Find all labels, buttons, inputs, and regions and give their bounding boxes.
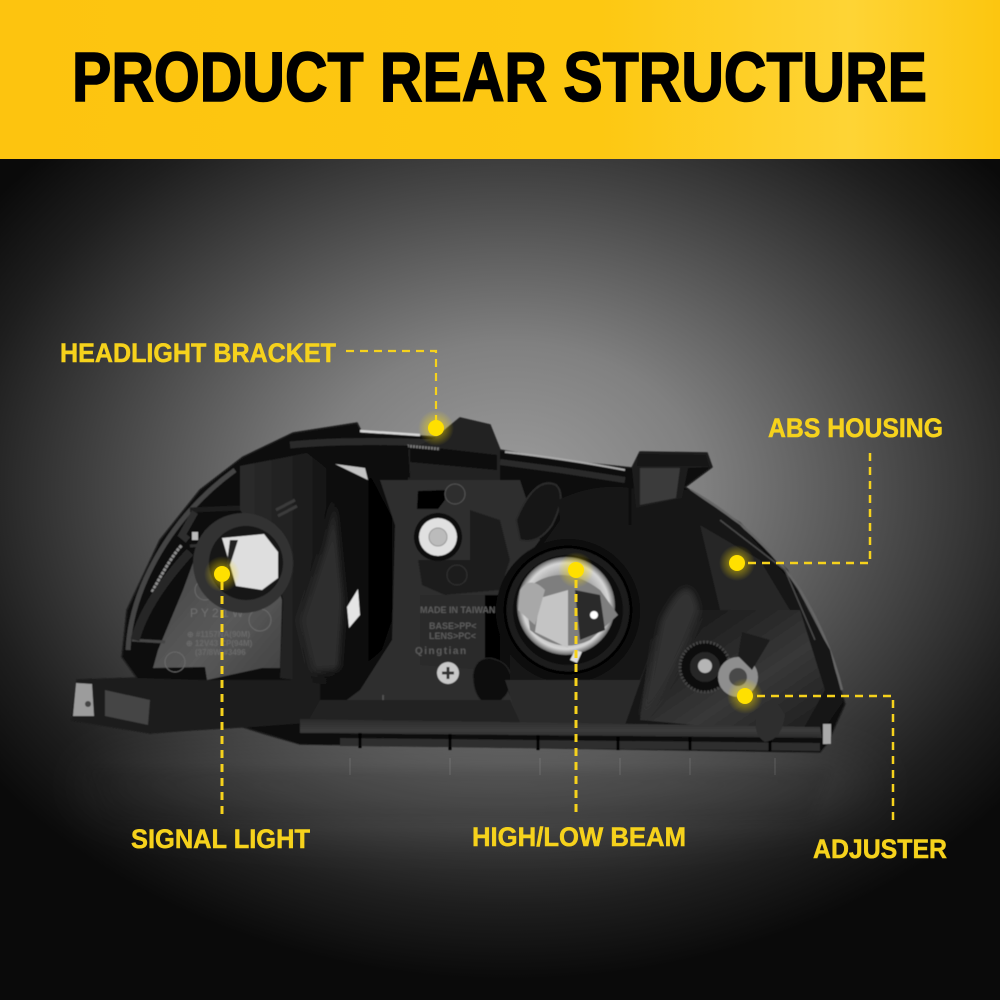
moulded bulb codes: (37/8W)#3496 [195, 648, 246, 657]
phillips screw [437, 662, 459, 684]
leader line: headlight bracket [346, 351, 436, 428]
floor reflection [80, 745, 880, 825]
mould marking text: MADE IN TAIWAN [420, 605, 495, 615]
headlight rear illustration [72, 418, 845, 752]
label: signal light: SIGNAL LIGHT [131, 824, 310, 854]
housing silhouette [72, 418, 845, 752]
callout: signal light [131, 556, 310, 854]
moulded bulb codes [186, 630, 253, 657]
lobe ribs [276, 500, 297, 516]
centre bolt [414, 513, 462, 561]
label: high/low beam: HIGH/LOW BEAM [472, 822, 686, 852]
label: headlight bracket: HEADLIGHT BRACKET [60, 338, 336, 368]
mould marking text [415, 605, 495, 657]
lobe label sticker [347, 589, 360, 628]
marker: signal light [204, 556, 240, 592]
leader line: high/low beam [574, 580, 578, 812]
marker: headlight bracket [418, 410, 454, 446]
grey plate below signal socket [153, 530, 282, 680]
label: abs housing: ABS HOUSING [768, 413, 943, 443]
lens rim highlights [128, 431, 842, 690]
moulded plate text: P Y 2 1 W [190, 606, 244, 620]
callout: high/low beam [472, 552, 686, 852]
left lens bulb wiring [132, 508, 240, 642]
marker: high/low beam [558, 552, 594, 588]
lobe soft highlight [300, 500, 345, 672]
mould marking text: Qingtian [415, 646, 468, 657]
corner pin [823, 724, 831, 744]
signal light socket [193, 513, 293, 613]
callout: headlight bracket [60, 338, 454, 446]
adjuster knob [756, 701, 785, 742]
callout: adjuster [727, 678, 947, 864]
header banner [0, 0, 1000, 159]
large dark lobe [240, 453, 392, 687]
leader line: abs housing [748, 452, 870, 563]
plug cap [473, 658, 511, 706]
callout: abs housing [719, 413, 943, 581]
label: adjuster: ADJUSTER [813, 834, 947, 864]
marker: adjuster [727, 678, 763, 714]
adjuster gear [680, 632, 770, 697]
moulded bulb codes: ⊕ 12V43 CP(94M) [186, 639, 253, 648]
mould marking text: BASE>PP< [429, 621, 477, 631]
right dark body [510, 452, 843, 735]
rubber elbow [516, 483, 561, 541]
central grey panel [300, 480, 540, 735]
leader line: adjuster [757, 696, 893, 825]
hand marking L: L [381, 693, 390, 710]
moulded bulb codes: ⊕ #1157NA(90M) [187, 630, 251, 639]
lower strip [253, 700, 828, 752]
leader line: signal light [220, 582, 224, 815]
left tab connector [72, 678, 320, 733]
marker: abs housing [719, 545, 755, 581]
high/low beam reflector [496, 539, 655, 725]
mould marking text: LENS>PC< [429, 631, 476, 641]
top bracket [335, 418, 500, 500]
